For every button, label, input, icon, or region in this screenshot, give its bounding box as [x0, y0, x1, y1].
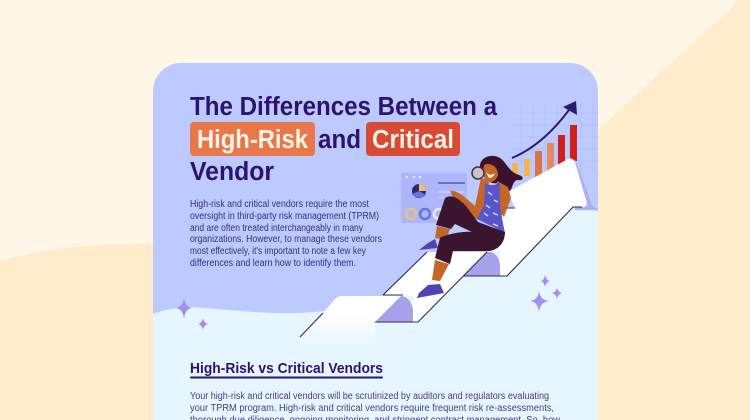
text block: intro: most effectively, it's important to note a few key [190, 246, 366, 257]
arrow shadow [575, 159, 598, 210]
lavender step blocks [375, 252, 500, 322]
upper flight and arrow head [490, 158, 587, 276]
lower wave background [153, 207, 598, 420]
text block: section body: Your high-risk and critical vendors will be scrutinized by auditors and regulators evaluating [190, 391, 549, 402]
chart: rising bars with arrow [512, 101, 598, 177]
title: Vendor [190, 158, 274, 186]
text block: intro: organizations. However, to manage these vendors [190, 234, 382, 245]
title: The Differences Between a [190, 93, 498, 121]
text block: section body: your TPRM program. High-risk and critical vendors require frequent risk re-assessments, [190, 403, 554, 414]
panel: infographic card [153, 63, 598, 420]
text block: intro [190, 199, 382, 269]
blue patterned top [477, 182, 505, 233]
chart: dashboard panel [401, 173, 467, 223]
text block: intro: High-risk and critical vendors require the most [190, 199, 369, 210]
text block: intro: differences and learn how to identify them. [190, 258, 356, 269]
icon: sparkles right [530, 275, 562, 312]
shoes [417, 239, 444, 298]
magnifying glass [472, 167, 484, 179]
skin: arms, face, shins [432, 164, 511, 281]
text block: section body [190, 391, 561, 420]
lower flight [383, 252, 487, 322]
text block: intro: and are often treated interchangeably in many [190, 223, 363, 234]
illustration: ascending white arrow staircase [300, 158, 598, 348]
heading: High-Risk vs Critical Vendors: High-Risk vs Critical Vendors [190, 360, 383, 377]
dark trousers [435, 196, 505, 264]
bottom landing fading into page [302, 296, 401, 337]
tag: High-Risk: High-Risk [197, 126, 309, 154]
text block: intro: oversight in third-party risk management (TPRM) [190, 211, 379, 222]
title: and [318, 126, 361, 154]
illustration: woman with magnifying glass [417, 156, 523, 298]
hair [480, 156, 523, 191]
title [190, 93, 498, 186]
tag: Critical: Critical [372, 126, 454, 154]
icon: sparkles left [176, 297, 208, 330]
